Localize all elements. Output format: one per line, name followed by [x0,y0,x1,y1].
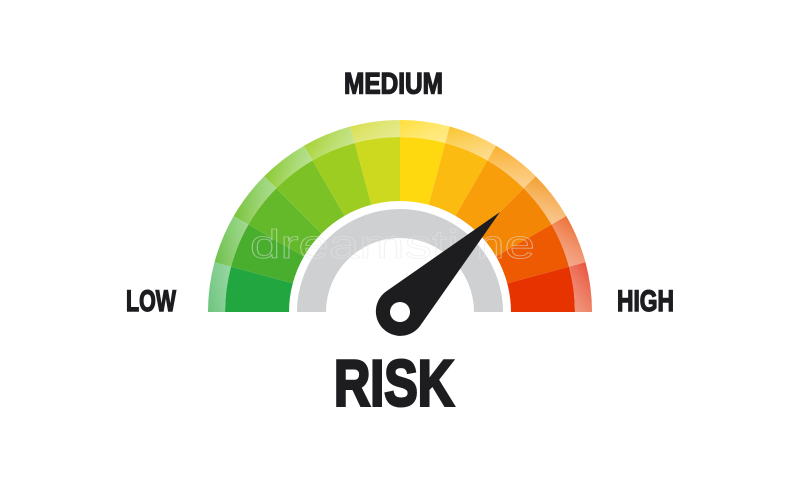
needle [376,212,500,336]
label: low: LOW [126,285,176,318]
gauge colour segments [225,137,575,312]
gauge inner grey arc [297,209,503,312]
title: risk: RISK [334,346,454,420]
watermark: dreamstime [250,223,535,267]
label: medium: MEDIUM [344,68,443,100]
label: high: HIGH [617,285,674,318]
gauge light outer band [208,120,592,312]
